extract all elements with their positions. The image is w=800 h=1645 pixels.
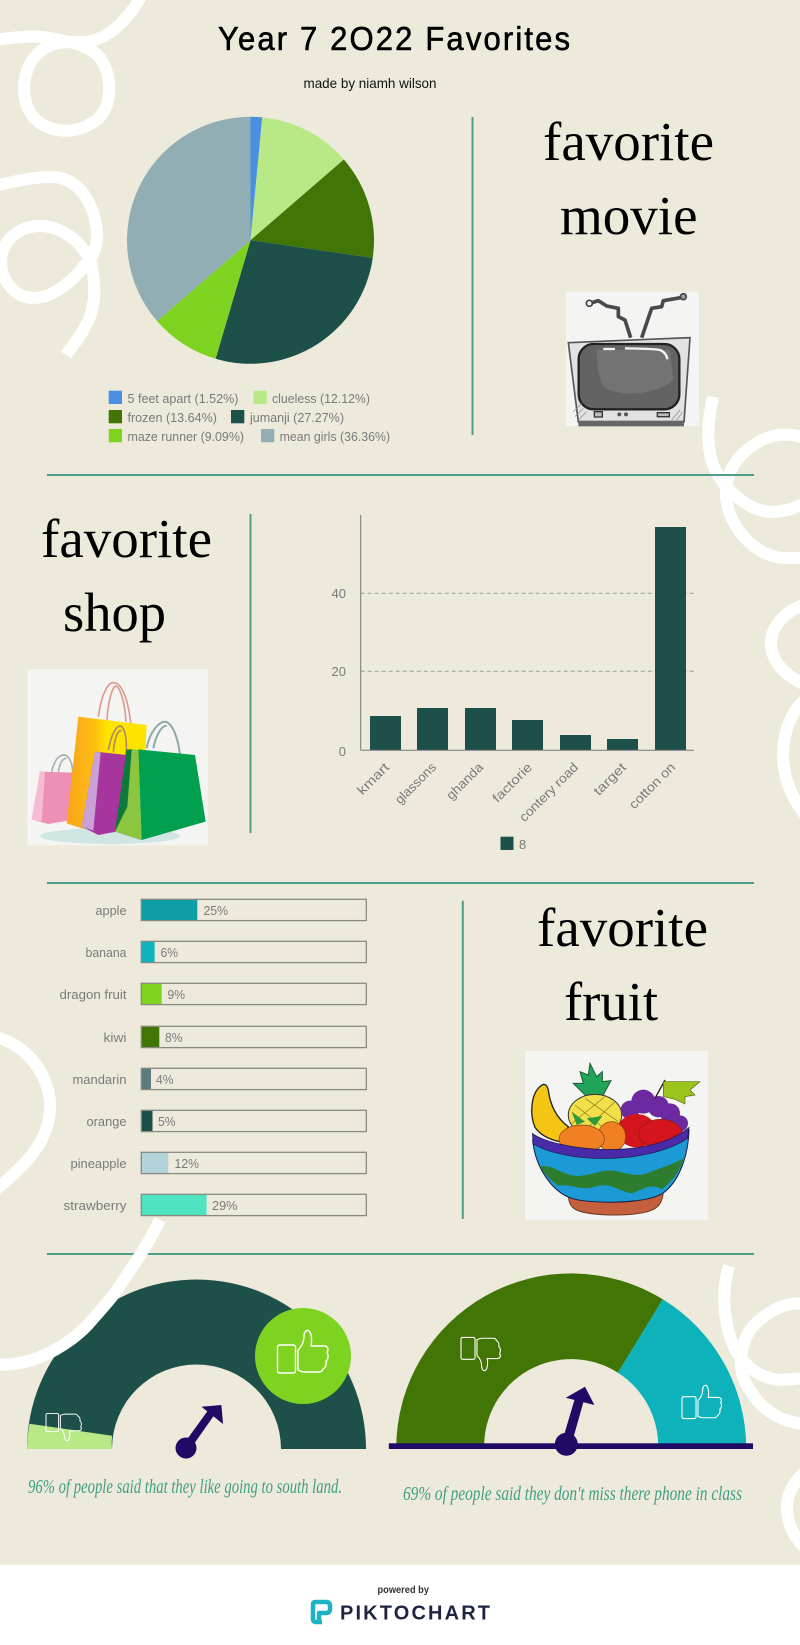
progress bars: favorite fruit: dragon fruit	[60, 987, 127, 1002]
icon: thumbs down on light segment	[46, 1413, 81, 1441]
bar chart: favorite shop: 40	[332, 586, 346, 601]
section divider 2	[47, 882, 754, 884]
progress bars: favorite fruit	[60, 899, 366, 1216]
footer band	[0, 1565, 800, 1645]
bar chart: favorite shop: factorie	[489, 760, 535, 805]
heading: favorite fruit: favorite	[537, 897, 708, 958]
icon: thumbs up on circle	[278, 1330, 328, 1373]
gauge: phones in class	[389, 1273, 753, 1456]
progress bars: favorite fruit: strawberry	[64, 1198, 127, 1213]
progress bars: favorite fruit: 5%	[158, 1114, 176, 1129]
pie legend: mean girls (36.36%)	[280, 429, 390, 444]
icon: shopping bags	[27, 669, 208, 845]
needle	[555, 1387, 594, 1456]
bar chart: favorite shop	[332, 515, 694, 852]
section divider 1	[47, 474, 754, 476]
divider: shop panel	[250, 514, 252, 833]
bar chart: favorite shop: kmart	[354, 759, 392, 798]
bar chart: favorite shop: 20	[332, 664, 346, 679]
pie legend: frozen (13.64%)	[128, 410, 217, 425]
progress bars: favorite fruit: 25%	[204, 903, 228, 918]
divider: fruit panel	[462, 901, 464, 1219]
logo mark	[313, 1602, 330, 1622]
white squiggle over gauge	[0, 1220, 160, 1365]
progress bars: favorite fruit: orange	[86, 1114, 126, 1129]
icon: thumbs up on teal segment	[682, 1385, 721, 1419]
heading: favorite movie: favorite	[543, 111, 714, 172]
heading: favorite shop: shop	[63, 582, 166, 643]
bar chart: favorite shop: target	[590, 759, 629, 798]
pie legend: jumanji (27.27%)	[249, 410, 344, 425]
progress bars: favorite fruit: mandarin	[72, 1072, 126, 1087]
pie legend: 5 feet apart (1.52%)	[128, 391, 238, 406]
subtitle: made by niamh wilson	[304, 75, 436, 91]
pie legend: clueless (12.12%)	[272, 391, 370, 406]
bar chart: favorite shop: cotton on	[626, 760, 678, 812]
progress bars: favorite fruit: 9%	[168, 987, 185, 1002]
gauge: going to south land	[0, 1220, 366, 1458]
caption: south land: 96% of people said that they like going to south land.	[28, 1476, 342, 1498]
needle	[176, 1405, 223, 1458]
heading: favorite shop: favorite	[41, 508, 212, 569]
title: Year 7 2O22 Favorites	[218, 20, 570, 57]
progress bars: favorite fruit: 6%	[160, 945, 178, 960]
section divider 3	[47, 1253, 754, 1255]
pie chart: favorite movie	[127, 117, 374, 364]
progress bars: favorite fruit: pineapple	[70, 1156, 126, 1171]
progress bars: favorite fruit: 8%	[165, 1030, 183, 1045]
bar chart: favorite shop: ghanda	[443, 759, 487, 803]
bar chart: favorite shop: 8	[519, 837, 526, 852]
icon: fruit bowl	[525, 1051, 708, 1220]
logo wordmark: PIKTOCHART	[340, 1602, 490, 1624]
progress bars: favorite fruit: 4%	[156, 1072, 174, 1087]
bar chart: favorite shop: contery road	[516, 760, 581, 825]
heading: favorite movie	[543, 111, 714, 246]
powered by: powered by	[378, 1584, 429, 1596]
bar chart: favorite shop: 0	[339, 744, 346, 759]
icon: thumbs down on green segment	[461, 1337, 500, 1371]
heading: favorite fruit: fruit	[564, 971, 658, 1032]
progress bars: favorite fruit: apple	[96, 903, 126, 918]
pie legend	[109, 391, 390, 444]
progress bars: favorite fruit: 29%	[212, 1198, 238, 1213]
progress bars: favorite fruit: banana	[86, 945, 127, 960]
icon: retro television	[566, 292, 699, 426]
heading: favorite fruit	[537, 897, 708, 1032]
progress bars: favorite fruit: 12%	[174, 1156, 199, 1171]
progress bars: favorite fruit: kiwi	[104, 1030, 127, 1045]
pie legend: maze runner (9.09%)	[128, 429, 244, 444]
divider: movie panel	[472, 117, 474, 435]
heading: favorite shop	[41, 508, 212, 643]
bar chart: favorite shop: glassons	[392, 759, 439, 807]
heading: favorite movie: movie	[560, 185, 698, 246]
